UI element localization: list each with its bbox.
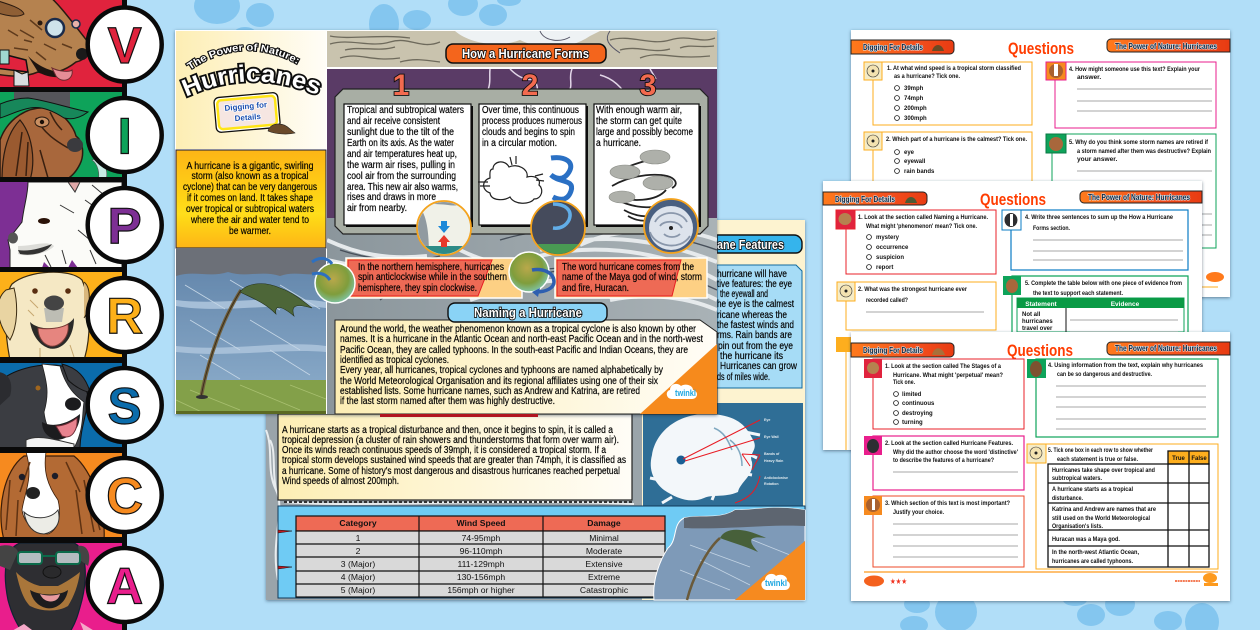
number 2: 2 bbox=[522, 69, 538, 102]
panel: Naming a Hurricane bbox=[335, 320, 717, 414]
header bar right bbox=[1107, 342, 1230, 355]
text: stages of a hurricane: A hurricane starts as a tropical disturbance and then, once it begins to spin, it is called a bbox=[282, 425, 613, 436]
question 5: your answer. bbox=[1077, 156, 1117, 163]
question 4: answer. bbox=[1077, 74, 1101, 81]
icon: cloud outline bbox=[478, 156, 544, 203]
question 2: Why did the author choose the word 'distinctive' bbox=[893, 449, 1018, 456]
label: Bands of Heavy Rain: Heavy Rain bbox=[764, 459, 783, 463]
label: Bands of Heavy Rain: Bands of bbox=[764, 452, 780, 456]
corner flash with twinkl logo bbox=[735, 541, 805, 600]
question 5 true or false table: subtropical waters. bbox=[1052, 475, 1102, 482]
label: Bands of Heavy Rain bbox=[764, 452, 783, 463]
question 5: a storm named after them was destructive? Explain bbox=[1077, 148, 1211, 155]
question 1: turning bbox=[902, 420, 923, 426]
worksheet page A bbox=[851, 30, 1230, 297]
header bar right: The Power of Nature: Hurricanes bbox=[1088, 193, 1190, 202]
footer bbox=[864, 572, 1218, 586]
corner flash with twinkl logo: twinkl bbox=[765, 578, 787, 588]
question 5 true or false table: disturbance. bbox=[1052, 495, 1083, 502]
panel: Hurricane Features text: ricane whereas the bbox=[717, 310, 787, 321]
header bar left: Digging For Details bbox=[863, 346, 923, 355]
icon: tornado clouds bbox=[609, 150, 676, 221]
icon circle: warm air rises bbox=[417, 201, 471, 256]
letter V: V bbox=[108, 17, 142, 74]
panel: Hurricane Features text: he eye is the calmest bbox=[717, 299, 794, 310]
number 3: 3 bbox=[640, 69, 656, 102]
text: stages of a hurricane bbox=[278, 414, 632, 500]
question 5 true or false table: hurricanes are called typhoons. bbox=[1052, 558, 1133, 565]
heading: How a Hurricane Forms: How a Hurricane Forms bbox=[462, 46, 589, 61]
header bar right: The Power of Nature: Hurricanes bbox=[1115, 42, 1217, 51]
question 1: 74mph bbox=[904, 96, 924, 102]
question 3: Justify your choice. bbox=[893, 509, 944, 516]
panel: intro text: over tropical or subtropical waters bbox=[186, 204, 314, 215]
header bar left: Digging For Details bbox=[835, 195, 895, 204]
question 5 true or false table: 5. Tick one box in each row to show whether bbox=[1048, 447, 1153, 454]
panel: Naming a Hurricane: the World Meteorological Organisation and its regional affiliates using one of their six bbox=[340, 376, 658, 387]
table: hurricane categories: 4 (Major) bbox=[341, 572, 375, 582]
question 4: 4. Using information from the text, explain why hurricanes bbox=[1048, 362, 1203, 369]
step 1 text box: Earth on its axis. As the water bbox=[347, 138, 455, 149]
question 1: 1. At what wind speed is a tropical storm classified bbox=[887, 65, 1021, 72]
question 3 bbox=[864, 496, 1024, 567]
panel: intro text: cyclone) that can be very dangerous bbox=[183, 182, 317, 193]
text: stages of a hurricane: tropical storm develops sustained wind speeds that are greater than 74mph, it is classified as bbox=[282, 455, 626, 466]
panel: intro text: storm (also known as a tropical bbox=[192, 171, 308, 182]
badge: digging for details: Details bbox=[234, 112, 262, 123]
step 1 text box: the warm air rises, pulling in bbox=[347, 160, 455, 171]
question 1: limited bbox=[902, 392, 922, 398]
table: hurricane categories: Moderate bbox=[586, 546, 622, 556]
question 5 with evidence table: 5. Complete the table below with one piece of evidence from bbox=[1025, 280, 1182, 287]
fact box: hemispheres: In the northern hemisphere, hurricanes bbox=[358, 262, 504, 273]
question 5 true or false table: still used on the World Meteorological bbox=[1052, 515, 1150, 522]
corner flash with twinkl logo: twinkl bbox=[675, 388, 696, 398]
panel: steps backdrop bbox=[335, 89, 708, 234]
panel: Hurricane Features text: hurricane will have bbox=[717, 269, 787, 280]
image: palm tree in storm bbox=[654, 508, 805, 600]
label: Eye Wall: Eye Wall bbox=[764, 435, 779, 439]
question 5 with evidence table bbox=[1003, 276, 1188, 332]
question 5 with evidence table: hurricanes bbox=[1022, 319, 1053, 325]
step 1 text box: and air temperatures heat up, bbox=[347, 149, 457, 160]
fact box: hemispheres: hemisphere, they spin clockwise. bbox=[358, 283, 477, 294]
panel: intro text bbox=[176, 150, 326, 248]
step 1 text box: Tropical and subtropical waters bbox=[347, 105, 464, 116]
letter S: S bbox=[108, 378, 142, 434]
step 2 text box: clouds and begins to spin bbox=[482, 127, 575, 138]
question 1: Tick one. bbox=[893, 379, 915, 386]
question 4: can be so dangerous and destructive. bbox=[1057, 371, 1152, 378]
worksheet page B bbox=[823, 181, 1202, 450]
VIPERS dog column bbox=[0, 0, 162, 630]
question 5 with evidence table: the text to support each statement. bbox=[1033, 290, 1123, 297]
heading: Naming a Hurricane: Naming a Hurricane bbox=[474, 305, 582, 320]
step 1 text box: and air receive consistent bbox=[347, 116, 440, 127]
panel: Naming a Hurricane: identified as tropical cyclones. bbox=[340, 355, 449, 366]
letter I bbox=[88, 98, 162, 172]
table: hurricane categories: 74-95mph bbox=[462, 533, 501, 543]
step 3 text box: the storm can get quite bbox=[596, 116, 682, 127]
question 2 bbox=[864, 132, 1032, 192]
subtitle: The Power of Nature: bbox=[184, 42, 300, 70]
question 3 stub bbox=[836, 337, 851, 450]
question 5 with evidence table: Not all bbox=[1022, 312, 1041, 318]
panel: P dog (prediction) bbox=[0, 182, 122, 270]
step 3 text box: large and possibly become bbox=[596, 127, 693, 138]
letter A bbox=[88, 548, 162, 622]
question 1: suspicion bbox=[876, 255, 904, 261]
number 1: 1 bbox=[393, 69, 409, 102]
panel: Hurricane Features text: tive features: the eye bbox=[717, 279, 792, 290]
table: hurricane categories bbox=[296, 516, 665, 597]
fact box: word origin: and fire, Huracan. bbox=[562, 283, 629, 294]
table: hurricane categories: Catastrophic bbox=[580, 585, 629, 595]
table: hurricane categories: Category bbox=[339, 518, 377, 528]
panel: R dog (retrieval) bbox=[0, 272, 122, 360]
question 5 true or false table: False bbox=[1191, 456, 1207, 462]
icon: spiral arrow bbox=[551, 158, 572, 228]
panel: V dog (vocabulary) bbox=[0, 0, 122, 87]
table: hurricane categories: 1 bbox=[356, 533, 361, 543]
letter V bbox=[88, 8, 162, 82]
panel: Naming a Hurricane: Every year, all hurricanes, tropical cyclones and typhoons are named alphabetically by bbox=[340, 365, 663, 376]
question 2: recorded called? bbox=[866, 297, 908, 304]
step 1 text box: cool air from the surrounding bbox=[347, 171, 456, 182]
panel: I dog (inference) bbox=[0, 92, 122, 180]
text: stages of a hurricane: a hurricane. Some of history's most dangerous and disastrous hurricanes reached perpetual bbox=[282, 466, 620, 477]
question 5 true or false table: True bbox=[1172, 456, 1185, 462]
panel: Hurricane Features text: rms. Rain bands are bbox=[717, 330, 792, 341]
step 2 text box: Over time, this continuous bbox=[482, 105, 579, 116]
question 4 bbox=[1046, 62, 1216, 128]
step 1 text box: rises and draws in more bbox=[347, 192, 436, 203]
heading: Naming a Hurricane bbox=[448, 303, 607, 322]
question 5 bbox=[1046, 134, 1216, 248]
label: Anticlockwise Rotation: Rotation bbox=[764, 482, 779, 486]
worksheet page C bbox=[851, 332, 1230, 601]
step 1 text box: air from nearby. bbox=[347, 203, 407, 214]
storm swirl background bbox=[327, 218, 717, 414]
heading: Questions bbox=[1008, 39, 1074, 58]
step 3 text box: With enough warm air, bbox=[596, 105, 682, 116]
question 2 bbox=[864, 436, 1024, 490]
panel: Naming a Hurricane: if the last storm named after them was highly destructive. bbox=[340, 396, 555, 407]
text: stages of a hurricane: tropical depression (a cluster of rain showers and thunderstorms that form over warm air). bbox=[282, 435, 619, 446]
table: hurricane categories: 130-156mph bbox=[457, 572, 505, 582]
question 2 bbox=[837, 282, 996, 330]
panel: Hurricane Features text: the hurricane its bbox=[720, 351, 783, 362]
panel: intro text: A hurricane is a gigantic, swirling bbox=[186, 161, 314, 172]
question 2: 2. Which part of a hurricane is the calmest? Tick one. bbox=[886, 136, 1027, 143]
header bar left: Digging For Details bbox=[863, 43, 923, 52]
panel: Naming a Hurricane: Pacific Ocean, they are called typhoons. In the south-east Pacific and Indian Oceans, they are bbox=[340, 345, 688, 356]
fact box: word origin: name of the Maya god of wind, storm bbox=[562, 272, 702, 283]
panel: Hurricane Features text: the eyewall and bbox=[720, 289, 768, 300]
table: hurricane categories: 156mph or higher bbox=[447, 585, 515, 595]
question 2: eyewall bbox=[904, 159, 926, 165]
step 1 text box: area. This new air also warms, bbox=[347, 182, 458, 193]
letter S bbox=[88, 368, 162, 442]
icon circle: dark storm bbox=[530, 201, 586, 256]
label: Anticlockwise Rotation bbox=[764, 476, 788, 485]
header bar left bbox=[851, 343, 954, 357]
panel: Naming a Hurricane: Around the world, the weather phenomenon known as a tropical cyclone is also known by other bbox=[340, 324, 697, 335]
question 5 true or false table: Organisation's lists. bbox=[1052, 523, 1103, 530]
question 5 with evidence table: Statement bbox=[1025, 301, 1058, 308]
step 3 text box bbox=[594, 104, 701, 227]
question 1: as a hurricane? Tick one. bbox=[894, 73, 960, 80]
question 4: 4. Write three sentences to sum up the How a Hurricane bbox=[1025, 214, 1173, 221]
footer logo bbox=[864, 272, 1224, 287]
question 1: 1. Look at the section called The Stages of a bbox=[885, 363, 1001, 370]
question 5 true or false table bbox=[1027, 444, 1218, 569]
step 3 text box: a hurricane. bbox=[596, 138, 641, 149]
panel: Naming a Hurricane: established lists. Some hurricane names, such as Andrew and Katrina, are retired bbox=[340, 386, 640, 397]
fact box: hemispheres: spin anticlockwise while in the southern bbox=[358, 272, 507, 283]
question 3: 3. Which section of this text is most important? bbox=[885, 500, 1010, 507]
question 5 true or false table: Huracan was a Maya god. bbox=[1052, 536, 1120, 543]
fact box: hemispheres bbox=[346, 258, 522, 298]
poster page 2 behind bbox=[266, 220, 805, 600]
letter P bbox=[88, 188, 162, 262]
header bar left bbox=[851, 40, 954, 54]
table: hurricane categories: Damage bbox=[587, 518, 621, 528]
question 5: 5. Why do you think some storm names are retired if bbox=[1069, 139, 1209, 146]
question 1: 1. Look at the section called Naming a Hurricane. bbox=[858, 214, 988, 221]
header bar right: The Power of Nature: Hurricanes bbox=[1115, 344, 1217, 353]
label: Anticlockwise Rotation: Anticlockwise bbox=[764, 476, 788, 480]
hurricane texture bbox=[266, 414, 642, 600]
badge: digging for details bbox=[214, 92, 295, 134]
question 1: mystery bbox=[876, 235, 900, 241]
header bar left bbox=[823, 192, 927, 205]
letter C: C bbox=[106, 468, 143, 524]
diagram: hurricane features bbox=[643, 403, 803, 509]
fact box: word origin bbox=[555, 258, 707, 298]
heading: Questions bbox=[980, 190, 1046, 209]
letter R bbox=[88, 278, 162, 352]
question 1 bbox=[836, 210, 996, 274]
panel: Hurricane Features text bbox=[717, 265, 802, 388]
heading: Questions bbox=[1007, 341, 1073, 360]
panel: intro text: where the air and water tend to bbox=[190, 215, 309, 226]
hidden pill edge below naming panel bbox=[380, 414, 538, 417]
step 1 text box: sunlight due to the tilt of the bbox=[347, 127, 454, 138]
table: hurricane categories: 3 (Major) bbox=[341, 559, 375, 569]
panel: Hurricane Features text: Hurricanes can grow bbox=[720, 361, 798, 372]
letter P: P bbox=[108, 198, 142, 254]
question 4 bbox=[1002, 210, 1188, 270]
header bar right bbox=[1080, 191, 1202, 203]
question 5 true or false table: In the north-west Atlantic Ocean, bbox=[1052, 549, 1139, 556]
question 2: 2. What was the strongest hurricane ever bbox=[858, 286, 967, 293]
step 2 text box: process produces numerous bbox=[482, 116, 582, 127]
question 1 bbox=[864, 359, 1024, 429]
question 5 with evidence table: Evidence bbox=[1111, 301, 1140, 308]
panel: Hurricane Features text: pin out from the eye bbox=[718, 341, 793, 352]
icon: globe with arrow right bbox=[509, 252, 554, 297]
panel: A dog (author) bbox=[0, 543, 122, 630]
badge: digging for details: Digging for bbox=[224, 100, 267, 113]
fact box: word origin: The word hurricane comes from the bbox=[562, 262, 694, 273]
table: hurricane categories: Wind Speed bbox=[456, 518, 506, 528]
corner flash with twinkl logo bbox=[640, 344, 717, 414]
question 1: 39mph bbox=[904, 86, 924, 92]
step 1 text box bbox=[344, 104, 473, 227]
table: hurricane categories: 2 bbox=[356, 546, 361, 556]
table: hurricane categories: 96-110mph bbox=[460, 546, 503, 556]
question 4: 4. How might someone use this text? Explain your bbox=[1069, 66, 1200, 73]
panel: intro text: if it comes on land. It takes shape bbox=[187, 193, 313, 204]
question 5 true or false table: Hurricanes take shape over tropical and bbox=[1052, 467, 1155, 474]
footer: ★★★ bbox=[890, 577, 907, 586]
header bar right bbox=[1107, 39, 1230, 52]
letter R: R bbox=[106, 288, 143, 344]
question 5 true or false table: Katrina and Andrew are names that are bbox=[1052, 506, 1156, 513]
question 1: What might 'phenomenon' mean? Tick one. bbox=[866, 223, 977, 230]
icon: globe with arrow left bbox=[312, 258, 355, 303]
text: stages of a hurricane: Wind speeds of almost 200mph. bbox=[282, 476, 399, 487]
table: hurricane categories: 5 (Major) bbox=[341, 585, 375, 595]
step 2 text box bbox=[478, 104, 588, 228]
question 1: destroying bbox=[902, 411, 933, 417]
letter C bbox=[88, 458, 162, 532]
question 2: 2. Look at the section called Hurricane Features. bbox=[885, 440, 1013, 447]
poster page 1 bbox=[172, 28, 720, 418]
question 1: continuous bbox=[902, 401, 935, 407]
text: stages of a hurricane: Once its winds reach continuous speeds of 39mph, it is considered a tropical storm. If a bbox=[282, 445, 606, 456]
question 1: 200mph bbox=[904, 106, 927, 112]
heading: Hurricane Features: ane Features bbox=[717, 237, 784, 252]
panel: Hurricane Features text: ds of miles wide. bbox=[717, 372, 770, 383]
title text: Hurricanes bbox=[178, 62, 322, 98]
question 2: to describe the features of a hurricane? bbox=[893, 457, 994, 464]
panel: C dog (clarifying) bbox=[0, 452, 122, 540]
question 2: rain bands bbox=[904, 169, 935, 175]
question 1 bbox=[864, 62, 1032, 125]
question 2: eye bbox=[904, 150, 915, 156]
question 1: report bbox=[876, 265, 893, 271]
question 5 with evidence table: travel over bbox=[1022, 326, 1053, 332]
label: Eye: Eye bbox=[764, 418, 770, 422]
table: hurricane categories: Extreme bbox=[588, 572, 620, 582]
spine and dividers bbox=[0, 0, 127, 630]
question 5 true or false table: each statement is true or false. bbox=[1057, 456, 1138, 463]
table: hurricane categories: 111-129mph bbox=[458, 559, 505, 569]
letter A: A bbox=[106, 558, 143, 614]
panel: intro text: be warmer. bbox=[229, 226, 271, 237]
question 4 bbox=[1027, 359, 1218, 437]
question 1: 300mph bbox=[904, 116, 927, 122]
image: palm tree in hurricane bbox=[176, 248, 326, 414]
panel: Naming a Hurricane: names. It is a hurricane in the Atlantic Ocean and north-east Pacific Ocean and in the north-west bbox=[340, 334, 703, 345]
question 5 true or false table: A hurricane starts as a tropical bbox=[1052, 486, 1133, 493]
table: hurricane categories: Extensive bbox=[585, 559, 623, 569]
panel: purple stormy sky bbox=[327, 69, 717, 239]
question 4: Forms section. bbox=[1033, 225, 1070, 232]
panel: category table backdrop bbox=[278, 506, 805, 598]
table: hurricane categories: Minimal bbox=[589, 533, 619, 543]
question 1: occurrence bbox=[876, 245, 909, 251]
panel: title bbox=[176, 31, 326, 149]
top cloud strip bbox=[327, 31, 717, 69]
icon circle: satellite hurricane bbox=[644, 199, 698, 253]
step 2 text box: in a circular motion. bbox=[482, 138, 557, 149]
panel: Hurricane Features text: the fastest winds and bbox=[717, 320, 794, 331]
question 1: Hurricane. What might 'perpetual' mean? bbox=[893, 372, 1003, 379]
letter I: I bbox=[118, 108, 132, 164]
panel: S dog (sequencing) bbox=[0, 363, 122, 450]
